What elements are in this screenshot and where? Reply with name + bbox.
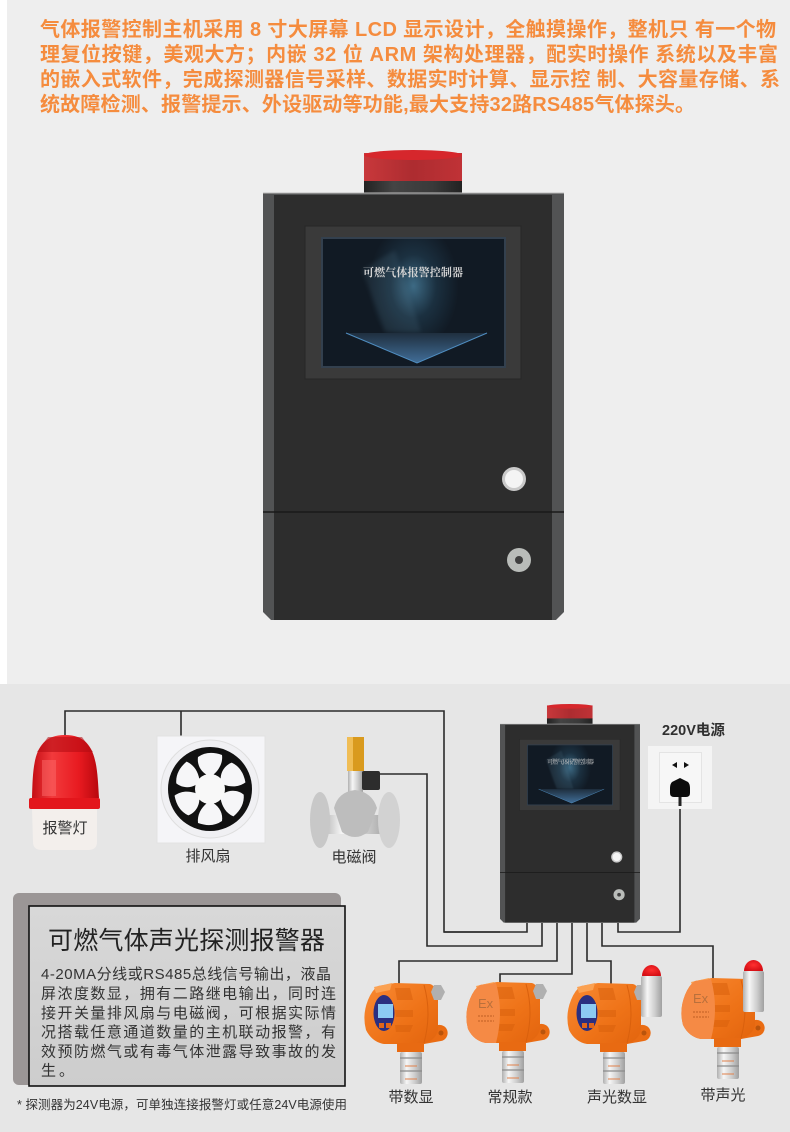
detector: sound and light [681,960,765,1104]
detector: standard [466,982,550,1106]
detector: sound and light: Ex [693,991,709,1006]
heading: product description: 的嵌入式软件，完成探测器信号采样、数据实时计算、显示控 制、大容量存储、系 [40,67,780,91]
panel body text: 况搭载任意通道数量的主机联动报警，有 [41,1023,336,1041]
heading: product description: 理复位按键，美观大方；内嵌 32 位 ARM 架构处理器，配实时操作 系统以及丰富 [40,42,778,66]
label: exhaust fan: 排风扇 [185,848,231,865]
heading: product description: 统故障检测、报警提示、外设驱动等功能,最大支持32路RS485气体探头。 [40,92,695,116]
panel body text: 生。 [41,1062,74,1080]
large controller unit [263,150,564,620]
top background panel [7,0,790,684]
bottom background panel [0,684,790,1132]
detector: sound and light with display [567,965,662,1106]
label: alarm lamp: 报警灯 [42,820,88,837]
label: 带数显 [388,1089,434,1106]
alarm lamp icon [29,735,100,850]
small controller unit: 可燃气体报警控制器 [547,758,594,766]
label: 带声光 [700,1086,746,1104]
connection wires [65,711,713,985]
heading: product description [40,17,780,116]
panel body text: 效预防燃气或有毒气体泄露导致事故的发 [41,1042,336,1060]
exhaust fan icon [157,736,265,843]
panel body text: 接开关量排风扇与电磁阀，可根据实际情 [41,1005,336,1022]
label: solenoid valve: 电磁阀 [331,849,377,866]
panel body text: 屏浓度数显，拥有二路继电输出，同时连 [41,986,336,1002]
label: 声光数显 [587,1088,647,1106]
panel body text [41,966,336,1080]
large controller unit: 可燃气体报警控制器 [363,265,463,279]
panel title: 可燃气体声光探测报警器 [48,927,325,955]
label: 常规款 [487,1089,533,1106]
heading: product description: 气体报警控制主机采用 8 寸大屏幕 LCD 显示设计，全触摸操作，整机只 有一个物 [40,17,776,41]
info panel: detector description [13,893,345,1086]
solenoid valve icon [310,737,400,848]
label: 220V power: 220V电源 [662,722,725,739]
detector: with display [364,983,448,1106]
small controller unit [500,704,640,923]
footnote: * 探测器为24V电源，可单独连接报警灯或任意24V电源使用 [17,1097,347,1112]
power socket icon [648,746,712,809]
detector: standard: Ex [478,996,494,1011]
panel body text: 4-20MA分线或RS485总线信号输出，液晶 [41,966,331,983]
